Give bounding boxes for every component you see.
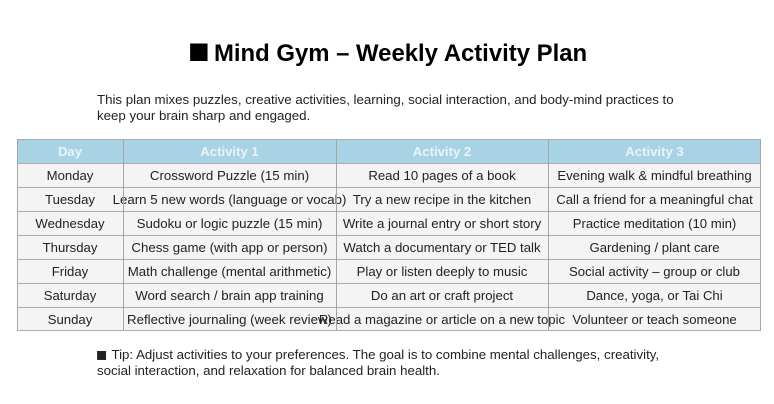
- title: [188, 30, 587, 71]
- row: Wednesday: Write a journal entry or short story: [343, 216, 541, 231]
- table header row: Activity 1: [200, 144, 259, 159]
- tip text: Tip: Adjust activities to your preferences. The goal is to combine mental challenges, creativity,: [112, 347, 659, 362]
- row: Sunday: Sunday: [48, 312, 92, 327]
- row: Saturday: [44, 288, 723, 303]
- row: Friday: Friday: [52, 264, 88, 279]
- title: ■: [188, 30, 210, 71]
- row: Thursday: Thursday: [43, 240, 97, 255]
- row: Tuesday: Learn 5 new words (language or vocab): [113, 192, 346, 207]
- table header row: Activity 2: [413, 144, 471, 159]
- table header row: [17, 139, 761, 163]
- row: Thursday: Gardening / plant care: [589, 240, 720, 255]
- table header row: Day: [58, 144, 82, 159]
- row: Saturday: Word search / brain app training: [135, 288, 324, 303]
- row: Friday: Math challenge (mental arithmetic): [128, 264, 331, 279]
- row: Wednesday: Wednesday: [35, 216, 105, 231]
- row: Sunday: [48, 312, 737, 327]
- row: Tuesday: Try a new recipe in the kitchen: [353, 192, 531, 207]
- table header row: Activity 3: [625, 144, 684, 159]
- weekly activity table: [17, 139, 761, 330]
- row: Tuesday: [45, 192, 753, 207]
- row: Saturday: Dance, yoga, or Tai Chi: [586, 288, 723, 303]
- row: Monday: Evening walk & mindful breathing: [557, 168, 752, 183]
- row: Thursday: Chess game (with app or person): [131, 240, 328, 255]
- row: Friday: Play or listen deeply to music: [357, 264, 527, 279]
- title: Mind Gym – Weekly Activity Plan: [214, 40, 587, 67]
- intro text: keep your brain sharp and engaged.: [97, 108, 310, 123]
- tip text: [96, 344, 659, 378]
- tip text: ■: [96, 344, 107, 365]
- row: Tuesday: Call a friend for a meaningful chat: [556, 192, 753, 207]
- row: Saturday: Do an art or craft project: [371, 288, 513, 303]
- row: Monday: Monday: [47, 168, 93, 183]
- row: Monday: Crossword Puzzle (15 min): [150, 168, 309, 183]
- row: Wednesday: Sudoku or logic puzzle (15 min): [137, 216, 322, 231]
- row: Sunday: Reflective journaling (week review): [127, 312, 332, 327]
- row: Sunday: Read a magazine or article on a new topic: [319, 312, 565, 327]
- row: Wednesday: [35, 216, 736, 231]
- row: Friday: Social activity – group or club: [569, 264, 740, 279]
- row: Thursday: Watch a documentary or TED talk: [343, 240, 541, 255]
- tip text: social interaction, and relaxation for balanced brain health.: [97, 363, 440, 378]
- row: Friday: [52, 264, 740, 279]
- intro text: This plan mixes puzzles, creative activities, learning, social interaction, and body-mind practices to: [97, 92, 674, 107]
- intro text: [97, 92, 674, 123]
- row: Thursday: [42, 240, 720, 255]
- row: Monday: Read 10 pages of a book: [368, 168, 516, 183]
- row: Sunday: Volunteer or teach someone: [572, 312, 737, 327]
- row: Saturday: Saturday: [44, 288, 96, 303]
- row: Monday: [47, 168, 752, 183]
- row: Tuesday: Tuesday: [45, 192, 95, 207]
- row: Wednesday: Practice meditation (10 min): [573, 216, 736, 231]
